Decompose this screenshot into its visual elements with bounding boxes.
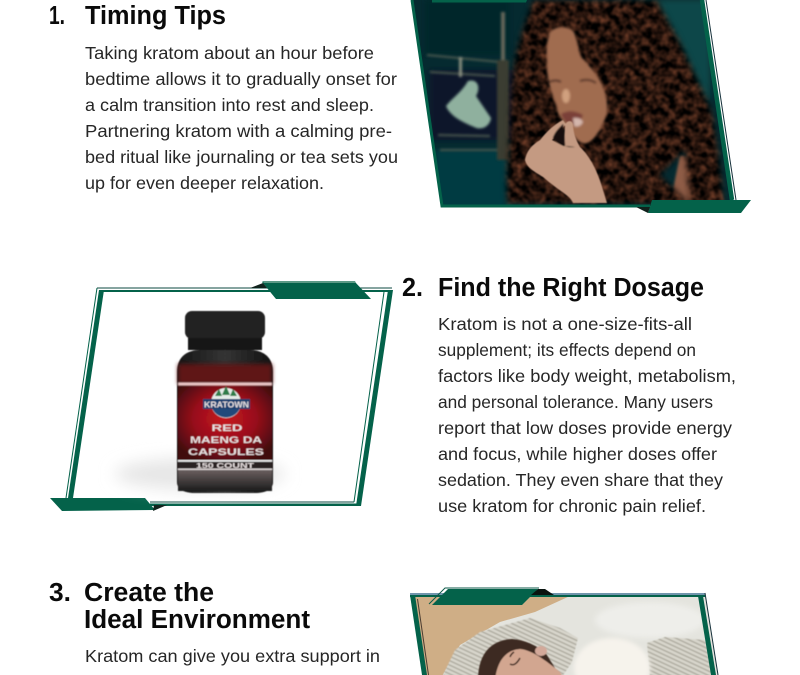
heading: 3. Create the Ideal Environment: Ideal Environment — [84, 606, 311, 634]
striped pillows — [443, 618, 578, 675]
body text: timing tips: Taking kratom about an hour before — [85, 43, 374, 63]
label text: RED — [212, 423, 243, 434]
body text: dosage: sedation. They even share that they — [438, 470, 723, 490]
body text: dosage: and personal tolerance. Many users — [438, 392, 713, 412]
man head — [478, 639, 565, 675]
photo: man sleeping in bed — [405, 588, 725, 675]
body text: dosage: use kratom for chronic pain relief. — [438, 496, 706, 516]
heading: 3. Create the Ideal Environment: Create the — [84, 579, 214, 607]
photo: bottle of red maeng da capsules — [50, 281, 393, 511]
body text: timing tips: Partnering kratom with a calming pre- — [85, 121, 392, 141]
kratown logo — [203, 386, 250, 418]
heading: 1. Timing Tips: Timing Tips — [85, 2, 226, 30]
label text: CAPSULES — [188, 447, 264, 458]
body text: dosage: Kratom is not a one-size-fits-all — [438, 314, 692, 334]
accent bar — [648, 200, 751, 213]
face — [547, 27, 607, 143]
shoulder — [670, 155, 724, 204]
hand — [525, 120, 607, 203]
heading: 3. Create the Ideal Environment: 3. — [49, 579, 71, 607]
body text: timing tips: a calm transition into rest and sleep. — [85, 95, 374, 115]
kratown logo: KRATOWN — [204, 400, 249, 410]
body text: timing tips: bed ritual like journaling or tea sets you — [85, 147, 398, 167]
hair — [506, 0, 723, 204]
heading: 2. Find the Right Dosage: 2. — [402, 274, 423, 302]
body text: environment: Kratom can give you extra support in — [85, 646, 380, 666]
body text: dosage: supplement; its effects depend on — [438, 340, 696, 360]
body text: timing tips: bedtime allows it to gradually onset for — [85, 69, 397, 89]
heading: 3. Create the Ideal Environment — [49, 579, 311, 634]
body text: dosage — [438, 314, 736, 516]
bottle — [177, 311, 273, 493]
body text: dosage: and focus, while higher doses offer — [438, 444, 717, 464]
body text: timing tips — [85, 43, 398, 193]
accent bar — [429, 588, 554, 605]
frame — [66, 288, 393, 506]
top accent bar remnant — [432, 0, 527, 2]
photo frame — [412, 0, 650, 206]
photo frame — [410, 593, 718, 675]
label text: MAENG DA — [190, 435, 262, 446]
accent bars — [262, 282, 371, 299]
photo: woman with curly hair taking capsule — [405, 0, 751, 213]
body text: dosage: factors like body weight, metabolism, — [438, 366, 736, 386]
section 1: timing tips text — [49, 2, 398, 193]
body text: dosage: report that low doses provide energy — [438, 418, 732, 438]
body text: timing tips: up for even deeper relaxation. — [85, 173, 324, 193]
heading: 1. Timing Tips: 1. — [49, 2, 65, 30]
bottle shadow — [115, 458, 285, 490]
label text — [188, 423, 264, 470]
section 3: create the ideal environment text — [49, 579, 380, 666]
section 2: find the right dosage text — [402, 274, 736, 516]
label text: 150 COUNT — [196, 463, 255, 470]
heading: 2. Find the Right Dosage: Find the Right Dosage — [438, 274, 704, 302]
